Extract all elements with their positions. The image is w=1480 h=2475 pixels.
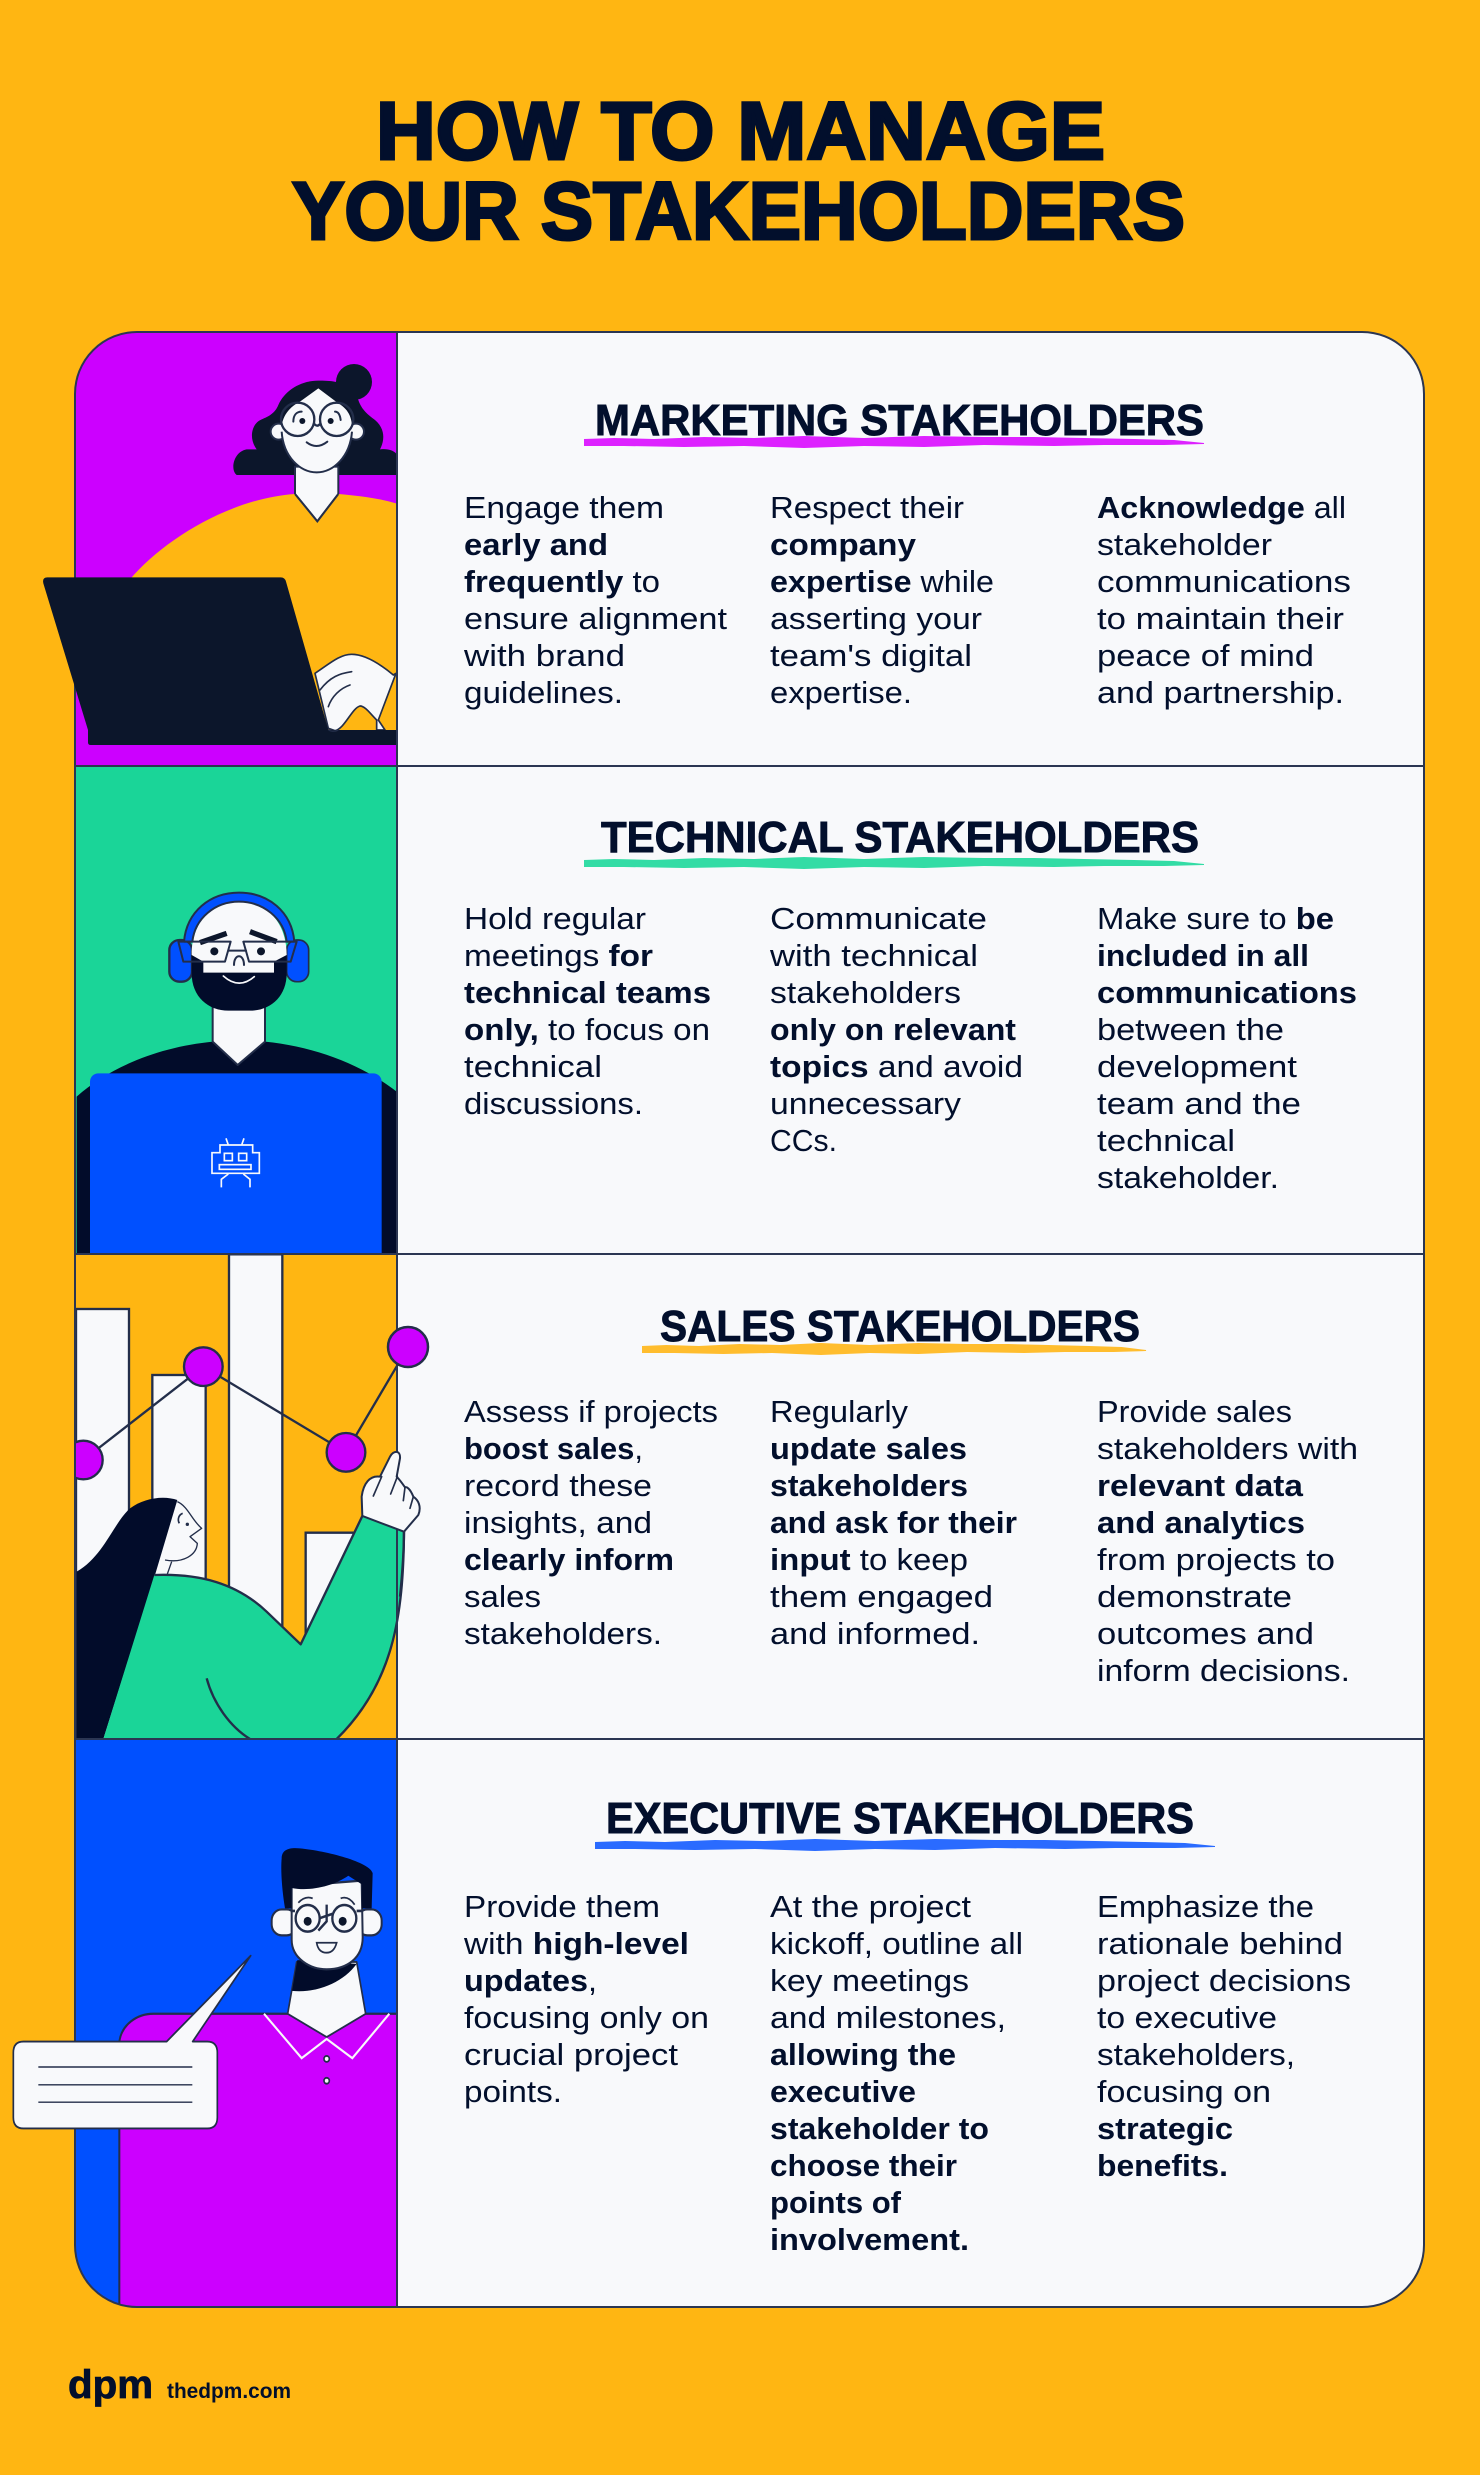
column: executive 3: to executive	[1097, 2000, 1277, 2035]
underline: marketing	[584, 436, 1204, 448]
column: sales 1: insights, and	[464, 1505, 652, 1540]
finger lines	[320, 672, 352, 707]
neck	[213, 1007, 265, 1065]
column: sales 1: record these	[464, 1468, 652, 1503]
heading: technical: TECHNICAL STAKEHOLDERS	[601, 813, 1199, 862]
marketing background	[75, 332, 397, 766]
headband	[184, 893, 294, 942]
face	[192, 900, 287, 973]
column: technical 2: CCs.	[770, 1123, 837, 1158]
illustration: woman at laptop	[130, 364, 396, 733]
face	[282, 388, 352, 472]
column: marketing 3: to maintain their	[1097, 601, 1344, 636]
column: sales 1: boost sales,	[464, 1431, 643, 1466]
icon: pointing hand	[362, 1452, 420, 1597]
face details	[178, 1513, 183, 1523]
chart point overflowing card	[388, 1327, 428, 1367]
panel text: technical	[464, 813, 1357, 1195]
beard	[292, 1960, 357, 1991]
column: sales 3: demonstrate	[1097, 1579, 1292, 1614]
column: marketing 1: Engage them	[464, 490, 664, 525]
column: marketing 1: frequently to	[464, 564, 660, 599]
column: executive 3: focusing on	[1097, 2074, 1271, 2109]
column: marketing 2: Respect their	[770, 490, 964, 525]
column: technical 3: communications	[1097, 975, 1357, 1010]
column: sales 3: and analytics	[1097, 1505, 1305, 1540]
column: technical 1: technical	[464, 1049, 602, 1084]
eyes	[304, 1917, 312, 1926]
panel: technical stakeholders	[75, 766, 397, 1254]
neck	[295, 467, 338, 521]
column: technical 1	[464, 901, 711, 1121]
eyes	[299, 418, 305, 424]
shirt	[130, 494, 396, 733]
mouth	[317, 1943, 337, 1953]
column: executive 2: involvement.	[770, 2222, 969, 2257]
column: executive 2: allowing the	[770, 2037, 956, 2072]
illustration: man with glasses	[119, 1848, 397, 2310]
column: executive 3: strategic	[1097, 2111, 1233, 2146]
chart points	[64, 1347, 365, 1479]
robot logo	[212, 1138, 259, 1187]
column: executive 1: with high-level	[463, 1926, 689, 1961]
column: executive 2: key meetings	[770, 1963, 969, 1998]
column: sales 3: stakeholders with	[1097, 1431, 1358, 1466]
column: technical 3: development	[1097, 1049, 1297, 1084]
column: technical 2: topics and avoid	[770, 1049, 1023, 1084]
hair	[233, 381, 396, 475]
beard	[192, 952, 287, 1011]
technical background	[75, 766, 397, 1254]
column: executive 2: stakeholder to	[770, 2111, 989, 2146]
column: marketing 3: communications	[1097, 564, 1351, 599]
column: sales 2: stakeholders	[770, 1468, 968, 1503]
column: sales 3: Provide sales	[1097, 1394, 1292, 1429]
chart line	[83, 1347, 408, 1460]
smile	[223, 976, 254, 983]
column: technical 3: Make sure to be	[1097, 901, 1334, 936]
column: technical 1: only, to focus on	[464, 1012, 710, 1047]
eyes	[210, 947, 218, 955]
column: sales 1: clearly inform	[464, 1542, 674, 1577]
column: technical 3: stakeholder.	[1097, 1160, 1279, 1195]
card dividers and border	[75, 332, 1424, 2307]
column: technical 2: Communicate	[770, 901, 987, 936]
column: technical 3	[1097, 901, 1357, 1195]
column: sales 2	[770, 1394, 1017, 1651]
chart bars	[76, 1254, 355, 1739]
icon: laptop overflowing card	[43, 577, 396, 745]
column: sales 2: update sales	[770, 1431, 967, 1466]
column: marketing 2: expertise while	[770, 564, 994, 599]
column: sales 3: inform decisions.	[1097, 1653, 1350, 1688]
column: sales 2: and informed.	[770, 1616, 980, 1651]
column: technical 2: only on relevant	[770, 1012, 1016, 1047]
footer logo: dpm	[68, 2363, 153, 2407]
column: marketing 3: stakeholder	[1097, 527, 1272, 562]
panel: executive stakeholders	[75, 1739, 397, 2310]
column: marketing 1	[463, 490, 727, 710]
panel: sales stakeholders	[60, 1254, 408, 1739]
column: sales 2: and ask for their	[770, 1505, 1017, 1540]
column: executive 1: Provide them	[464, 1889, 660, 1924]
footer logo	[68, 2363, 291, 2407]
column: executive 1: points.	[464, 2074, 562, 2109]
column: technical 1: discussions.	[464, 1086, 643, 1121]
eyebrows and smile	[293, 412, 341, 446]
executive background	[75, 1739, 397, 2307]
column: marketing 3: peace of mind	[1097, 638, 1314, 673]
column: technical 2: with technical	[769, 938, 978, 973]
column: technical 2: stakeholders	[770, 975, 961, 1010]
column: sales 1: stakeholders.	[464, 1616, 662, 1651]
column: executive 2: and milestones,	[770, 2000, 1006, 2035]
heading: marketing: MARKETING STAKEHOLDERS	[595, 396, 1204, 445]
column: executive 2: At the project	[770, 1889, 971, 1924]
footer logo: thedpm.com	[167, 2380, 291, 2403]
column: sales 1: sales	[464, 1579, 541, 1614]
buttons	[324, 2056, 329, 2062]
torso	[77, 1042, 397, 1254]
eyebrows	[298, 1897, 355, 1905]
column: marketing 3	[1097, 490, 1351, 710]
column: executive 1: updates,	[464, 1963, 597, 1998]
column: marketing 3: and partnership.	[1097, 675, 1344, 710]
column: technical 1: meetings for	[464, 938, 653, 973]
panel text: executive	[463, 1794, 1351, 2257]
title: YOUR STAKEHOLDERS	[292, 166, 1185, 257]
heading: sales: SALES STAKEHOLDERS	[660, 1302, 1140, 1351]
column: technical 3: technical	[1097, 1123, 1235, 1158]
eyebrows	[200, 933, 227, 943]
hand	[315, 654, 396, 731]
title	[292, 86, 1185, 257]
column: technical 3: included in all	[1097, 938, 1309, 973]
underline: sales	[642, 1343, 1146, 1355]
column: executive 3: stakeholders,	[1097, 2037, 1295, 2072]
column: marketing 2: company	[770, 527, 917, 562]
neck fill	[295, 494, 338, 521]
column: sales 2: Regularly	[770, 1394, 909, 1429]
column: marketing 1: with brand	[463, 638, 625, 673]
sweater	[103, 1516, 404, 1739]
column: technical 1: Hold regular	[464, 901, 646, 936]
hair	[77, 1498, 177, 1739]
ears	[271, 424, 364, 440]
column: sales 3	[1097, 1394, 1358, 1688]
column: marketing 2: expertise.	[770, 675, 912, 710]
column: marketing 3: Acknowledge all	[1097, 490, 1346, 525]
glasses	[178, 942, 297, 965]
underline: technical	[584, 857, 1204, 869]
column: marketing 2: team's digital	[770, 638, 972, 673]
glasses	[281, 403, 353, 436]
panel: marketing stakeholders	[75, 332, 397, 766]
panel text: sales	[464, 1302, 1358, 1688]
column: sales 3: from projects to	[1097, 1542, 1335, 1577]
column: executive 2: choose their	[770, 2148, 957, 2183]
column: marketing 2	[770, 490, 994, 710]
column: executive 3	[1097, 1889, 1351, 2183]
column: marketing 1: guidelines.	[464, 675, 623, 710]
column: technical 2: unnecessary	[770, 1086, 962, 1121]
column: executive 2: points of	[770, 2185, 902, 2220]
column: executive 3: rationale behind	[1097, 1926, 1343, 1961]
column: marketing 2: asserting your	[770, 601, 982, 636]
shirt	[119, 2014, 397, 2310]
column: executive 2: kickoff, outline all	[770, 1926, 1023, 1961]
bun	[336, 364, 372, 400]
column: technical 3: team and the	[1097, 1086, 1301, 1121]
column: sales 1: Assess if projects	[464, 1394, 718, 1429]
column: technical 2	[769, 901, 1023, 1158]
neck	[288, 1962, 366, 2037]
column: executive 3: Emphasize the	[1097, 1889, 1314, 1924]
card panel	[75, 332, 1424, 2307]
column: technical 3: between the	[1097, 1012, 1284, 1047]
face	[156, 1502, 202, 1574]
illustration: man with headphones	[77, 893, 397, 1254]
laptop	[90, 1073, 382, 1254]
title: HOW TO MANAGE	[376, 86, 1105, 177]
face	[292, 1881, 363, 1969]
underline: executive	[595, 1839, 1215, 1851]
column: executive 2: executive	[770, 2074, 916, 2109]
column: executive 3: project decisions	[1097, 1963, 1351, 1998]
column: technical 1: technical teams	[464, 975, 711, 1010]
column: sales 3: relevant data	[1097, 1468, 1304, 1503]
icon: speech bubble	[13, 1956, 251, 2128]
column: marketing 1: early and	[464, 527, 608, 562]
column: sales 3: outcomes and	[1097, 1616, 1314, 1651]
ears	[272, 1909, 382, 1935]
column: marketing 1: ensure alignment	[464, 601, 727, 636]
panel text: marketing	[463, 396, 1351, 710]
hair	[281, 1848, 373, 1908]
column: sales 2: input to keep	[770, 1542, 968, 1577]
column: executive 3: benefits.	[1097, 2148, 1228, 2183]
column: executive 1: crucial project	[464, 2037, 678, 2072]
column: executive 1	[463, 1889, 709, 2109]
collar	[264, 2014, 389, 2058]
column: executive 1: focusing only on	[464, 2000, 709, 2035]
column: sales 2: them engaged	[770, 1579, 993, 1614]
column: sales 1	[464, 1394, 718, 1651]
heading: executive: EXECUTIVE STAKEHOLDERS	[606, 1794, 1194, 1843]
illustration: woman pointing at chart	[60, 1254, 408, 1739]
glasses	[291, 1905, 362, 1932]
ear cups	[169, 940, 192, 982]
sales background	[75, 1254, 397, 1739]
column: executive 2	[770, 1889, 1023, 2257]
